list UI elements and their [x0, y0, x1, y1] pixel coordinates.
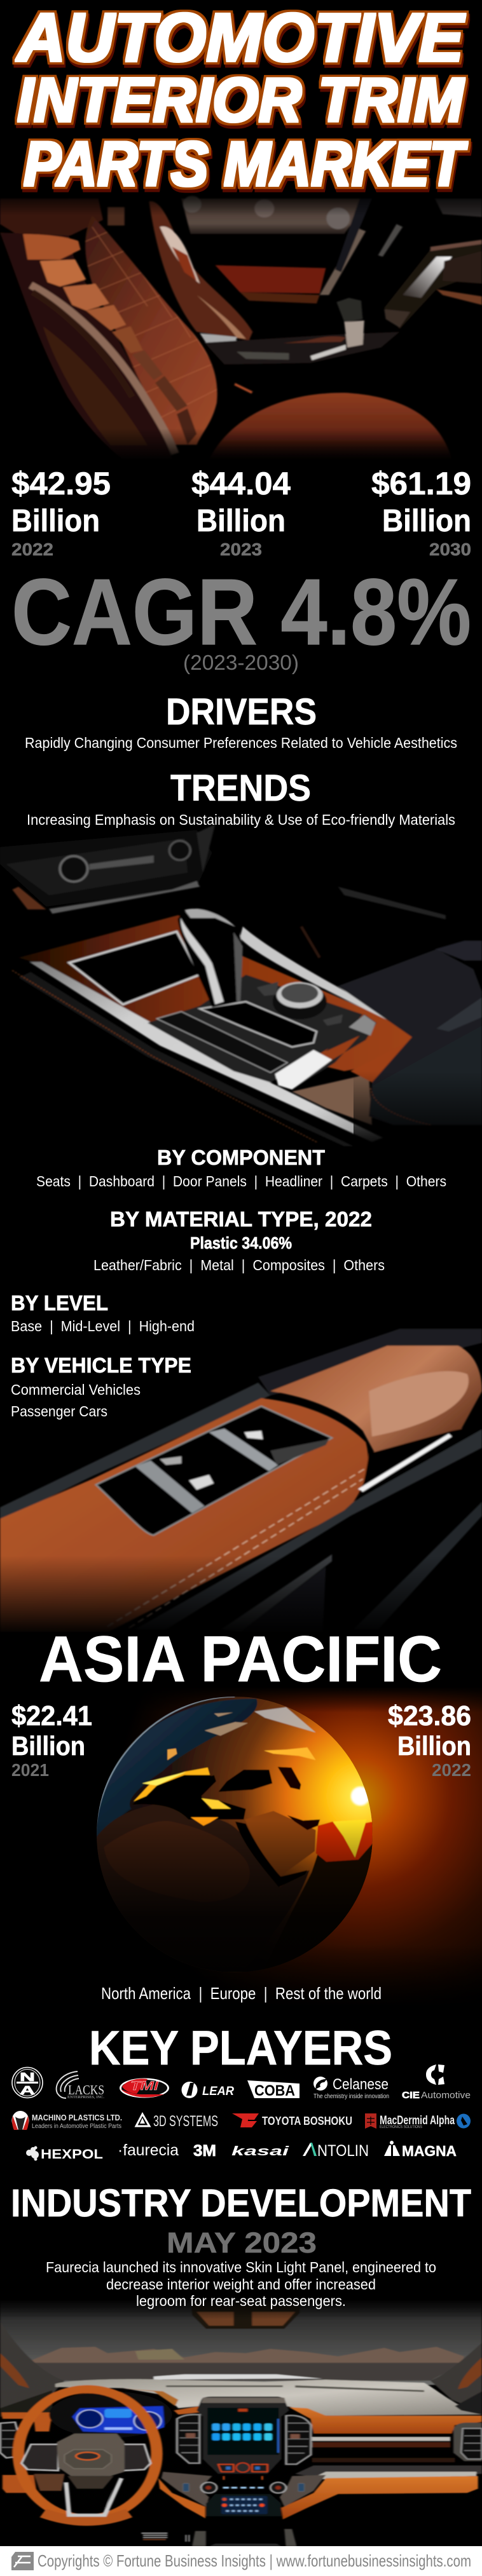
stat: 2023 market size: $44.04 [191, 466, 291, 501]
trends [27, 768, 455, 828]
segment: by vehicle type: Commercial Vehicles [11, 1381, 141, 1398]
stat: 2030 market size: $61.19 [371, 466, 471, 501]
trends: Increasing Emphasis on Sustainability & Use of Eco-friendly Materials [27, 811, 455, 828]
development description [46, 2259, 436, 2309]
stat: 2023 market size: 2023 [220, 539, 262, 559]
other regions: North America | Europe | Rest of the world [101, 1984, 382, 2003]
logo: Lacks: ENTERPRISES, INC. [67, 2096, 105, 2099]
stat: 2022 market size: $42.95 [11, 466, 111, 501]
stat: Asia Pacific 2021: 2021 [11, 1760, 49, 1780]
stat: Asia Pacific 2022: 2022 [432, 1760, 471, 1780]
image: gear console [0, 824, 482, 1151]
stat: Asia Pacific 2021: Billion [11, 1731, 85, 1761]
logo: Magna [384, 2141, 457, 2159]
logo: 3D Systems: 3D SYSTEMS [153, 2113, 218, 2130]
logo: MacDermid Alpha: MacDermid Alpha [380, 2114, 455, 2127]
logo: MacDermid Alpha [365, 2113, 471, 2129]
logo: 3D Systems [136, 2113, 218, 2130]
segment: by level: Base | Mid-Level | High-end [11, 1318, 195, 1334]
stat: 2030 market size: 2030 [429, 539, 471, 559]
logo: Celanese: The chemistry inside innovation [313, 2093, 389, 2100]
logo: Lear [182, 2082, 234, 2098]
trends: TRENDS [170, 768, 311, 809]
segment: by vehicle type: BY VEHICLE TYPE [11, 1353, 191, 1377]
logo: Machino Plastics: MACHINO PLASTICS LTD. [32, 2113, 122, 2122]
logo: NA: A [20, 2084, 35, 2097]
stat: 2030 market size [371, 466, 471, 559]
stat: 2030 market size: Billion [382, 504, 471, 538]
logo: Lacks [57, 2071, 105, 2099]
logo: NA: N [20, 2071, 35, 2084]
segment: by material type: Leather/Fabric | Metal | Composites | Others [93, 1257, 385, 1273]
development description: Faurecia launched its innovative Skin Light Panel, engineered to [46, 2259, 436, 2275]
logo: Toyota Boshoku: TOYOTA BOSHOKU [262, 2115, 352, 2127]
stat: Asia Pacific 2022: $23.86 [388, 1700, 471, 1732]
date: May 2023: MAY 2023 [167, 2227, 317, 2259]
image: door armrest [0, 1329, 482, 1641]
logo: Antolin: NTOLIN [317, 2142, 369, 2160]
stat: 2023 market size [191, 466, 291, 559]
footer [0, 2546, 482, 2576]
logo: Faurecia: ·faurecia [118, 2141, 179, 2159]
segment: by component [36, 1146, 446, 1190]
logo: Hexpol [26, 2146, 103, 2162]
logo: MacDermid Alpha: ELECTRONICS SOLUTIONS [380, 2125, 422, 2129]
logo: 3M: 3M [193, 2142, 216, 2160]
logo: Kasai: kasai [231, 2145, 289, 2159]
logo: Celanese: Celanese [333, 2076, 389, 2093]
logo: NA [12, 2068, 43, 2098]
logo: Lear: LEAR [202, 2085, 234, 2098]
stat: Asia Pacific 2022: Billion [397, 1731, 471, 1761]
drivers [25, 691, 457, 751]
drivers: DRIVERS [166, 691, 317, 733]
illustration: glowing globe [97, 1689, 482, 1988]
segment: by vehicle type: Passenger Cars [11, 1403, 107, 1420]
image: leather car seats [0, 190, 482, 461]
stat: 2022 market size: Billion [11, 504, 100, 538]
development description: decrease interior weight and offer increased [106, 2276, 376, 2293]
segment: by material type: BY MATERIAL TYPE, 2022 [110, 1207, 372, 1231]
logo: CIE Automotive: Automotive [421, 2090, 471, 2101]
title: INTERIOR TRIM [17, 65, 465, 135]
logo: Machino Plastics: Leaders in Automotive Plastic Parts [32, 2123, 121, 2130]
title: AUTOMOTIVE [15, 0, 465, 76]
segment: by material type [93, 1207, 385, 1273]
logo: Hexpol: HEXPOL [41, 2147, 103, 2162]
title [15, 0, 468, 199]
stat: Asia Pacific 2021: $22.41 [11, 1700, 92, 1732]
development description: legroom for rear-seat passengers. [136, 2293, 346, 2309]
drivers: Rapidly Changing Consumer Preferences Related to Vehicle Aesthetics [25, 735, 457, 751]
CAGR figure: (2023-2030) [183, 651, 299, 674]
logo: TMI [120, 2078, 169, 2098]
logo: CIE Automotive [402, 2064, 471, 2101]
icon: Fortune Business Insights logo [11, 2552, 34, 2570]
logo: Lacks: LACKS [68, 2082, 104, 2098]
logo: Machino Plastics [11, 2111, 122, 2130]
segment: by material type: Plastic 34.06% [190, 1233, 292, 1252]
stat: 2022 market size [11, 466, 111, 559]
region heading: Asia Pacific: ASIA PACIFIC [39, 1623, 442, 1695]
logos: key players [11, 2064, 471, 2162]
image: dashboard [0, 2298, 482, 2552]
segment: by level: BY LEVEL [11, 1291, 108, 1315]
segment: by vehicle type [11, 1353, 191, 1420]
segment: by component: Seats | Dashboard | Door Panels | Headliner | Carpets | Others [36, 1173, 446, 1190]
segment: by component: BY COMPONENT [157, 1146, 325, 1169]
logo: Magna: MAGNA [402, 2143, 457, 2159]
stat: Asia Pacific 2022 [388, 1700, 471, 1780]
stat: 2022 market size: 2022 [11, 539, 53, 559]
stat: Asia Pacific 2021 [11, 1700, 92, 1780]
stat: 2023 market size: Billion [196, 504, 286, 538]
heading: key players: KEY PLAYERS [89, 2021, 392, 2075]
logo: Toyota Boshoku [232, 2113, 352, 2127]
logo: COBA: COBA [254, 2082, 295, 2099]
logo: Celanese [313, 2076, 389, 2100]
segment: by level [11, 1291, 195, 1334]
logo: CIE Automotive: CIE [402, 2090, 420, 2101]
logo: TMI: TMI [130, 2080, 159, 2093]
